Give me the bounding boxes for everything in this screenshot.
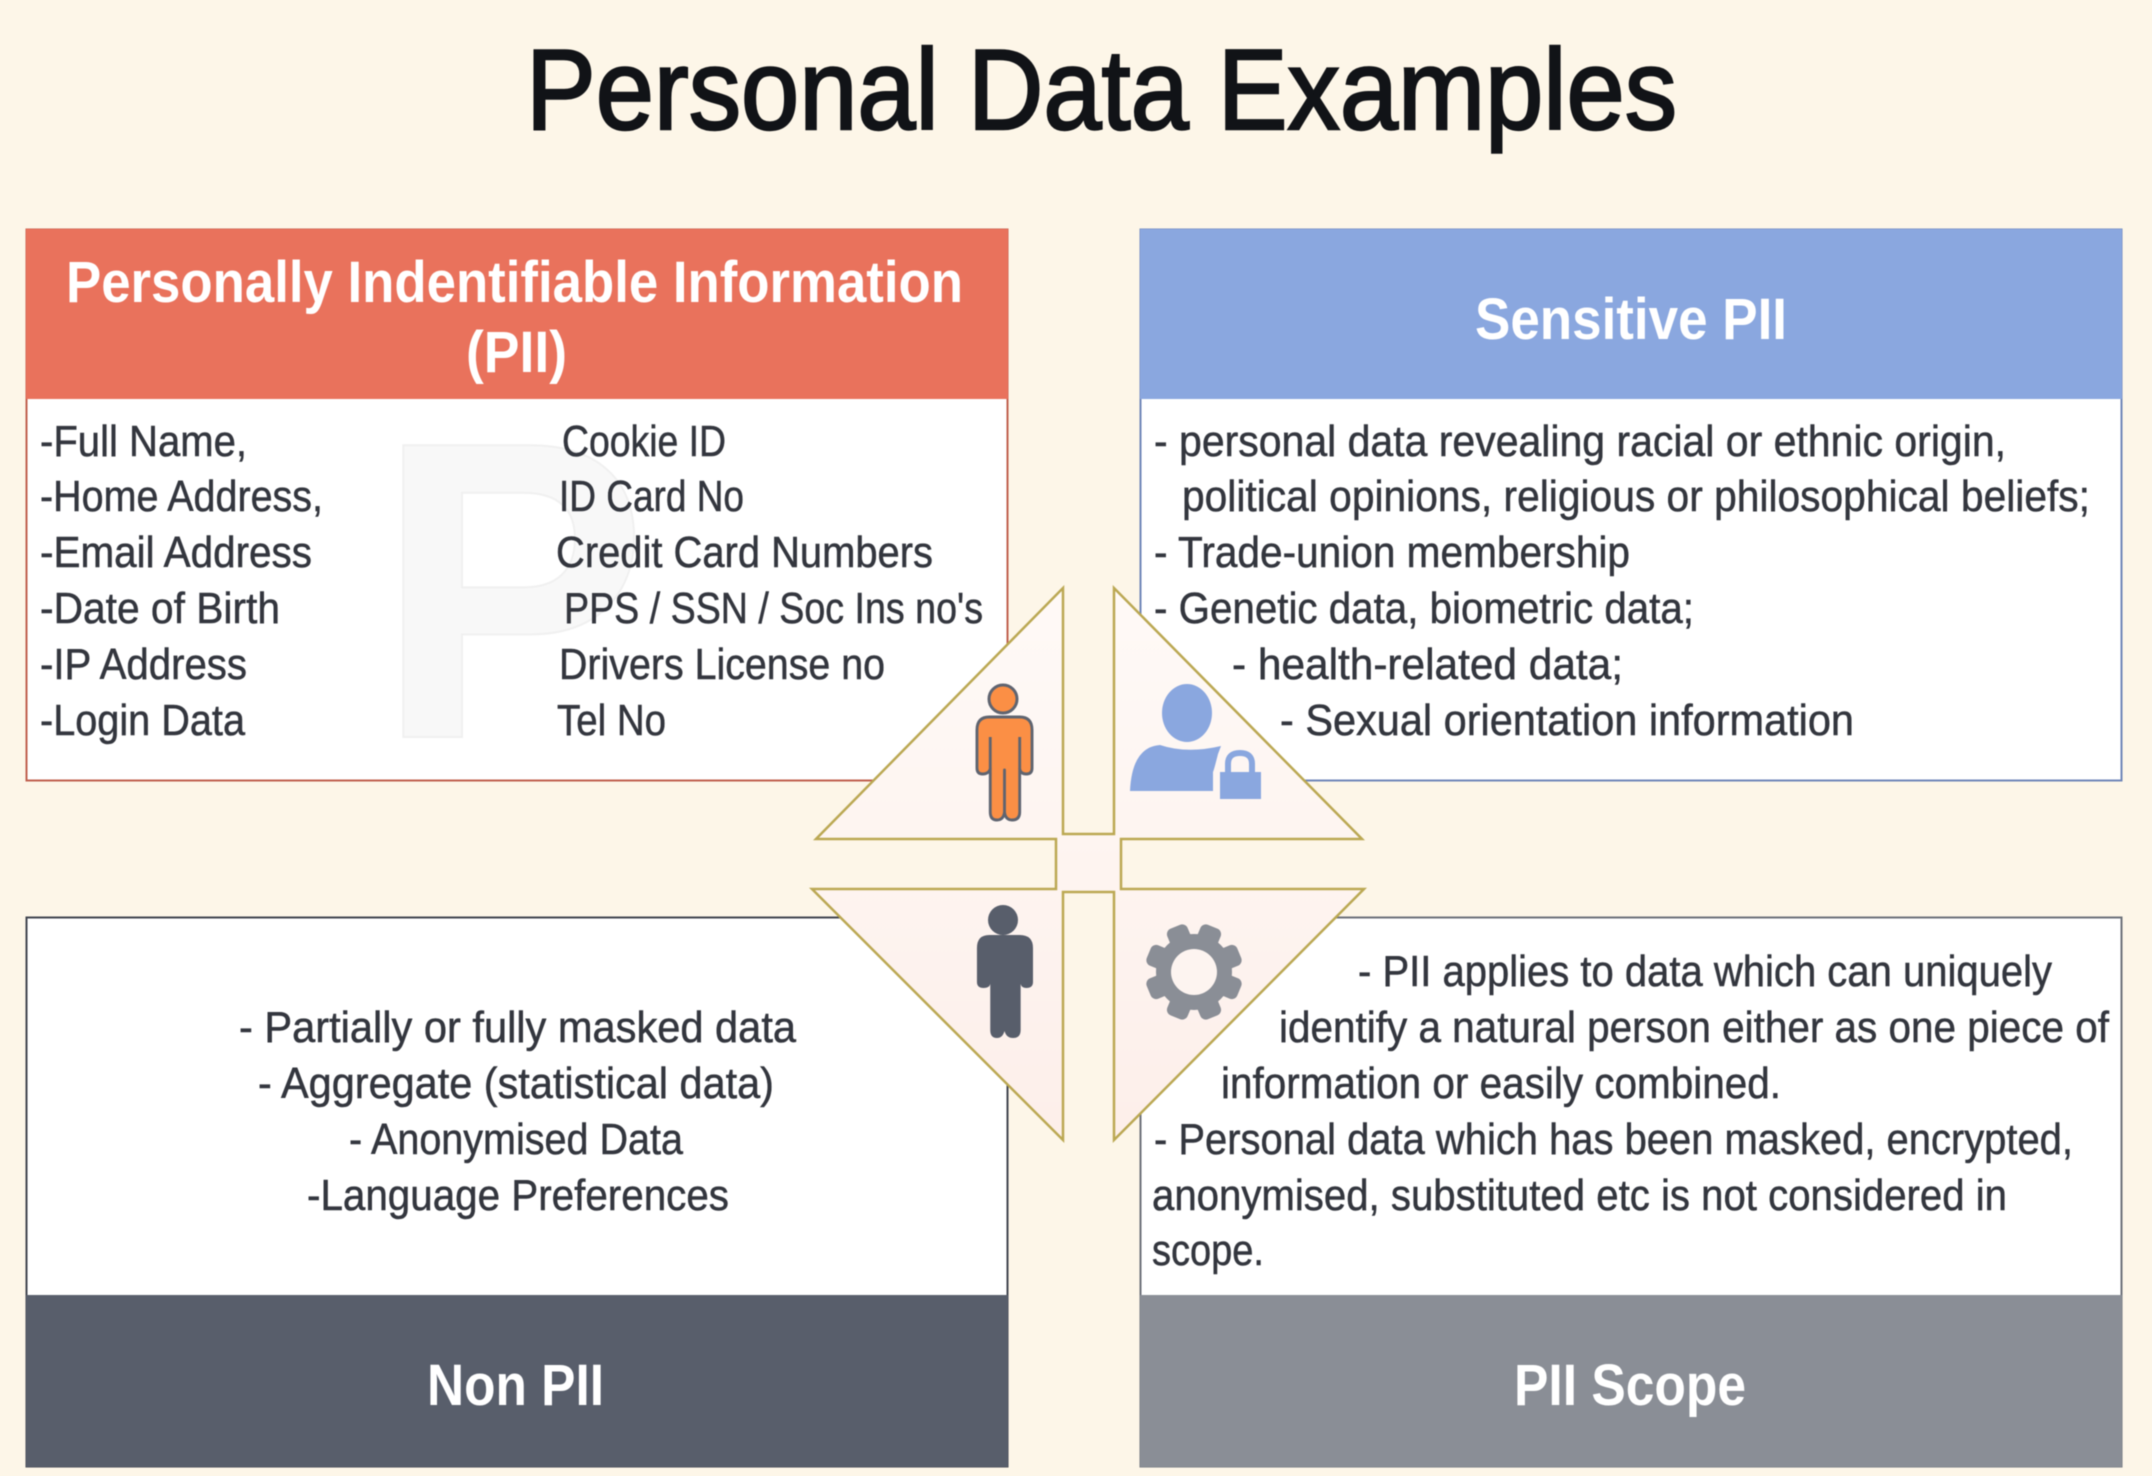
text block: sensitive data list: political opinions, religious or philosophical beliefs;	[1182, 472, 2090, 521]
text block: PII identifiers left column: -Date of Birth	[40, 584, 280, 633]
icon: blue person with padlock	[1130, 684, 1261, 799]
text block: non PII list: - Anonymised Data	[349, 1115, 683, 1164]
text block: PII identifiers left column: -Home Address,	[40, 472, 323, 521]
panel footer: PII scope: PII Scope	[1514, 1353, 1746, 1418]
text block: PII identifiers left column: -IP Address	[40, 640, 247, 689]
text block: PII identifiers right column	[556, 417, 983, 745]
panel header: sensitive PII	[1140, 229, 2122, 399]
text block: PII scope description: information or easily combined.	[1221, 1059, 1781, 1108]
text block: PII identifiers right column: ID Card No	[559, 472, 744, 521]
text block: PII scope description	[1152, 947, 2110, 1275]
panel: PII scope	[1140, 918, 2122, 1467]
text block: PII scope description: - Personal data which has been masked, encrypted,	[1154, 1115, 2073, 1164]
icon: gear	[1145, 923, 1243, 1021]
panel header: PII	[26, 229, 1008, 399]
panel: sensitive PII	[1140, 229, 2122, 780]
text block: PII identifiers left column: -Email Address	[40, 528, 312, 577]
central cross diagram	[812, 588, 1364, 1140]
text block: sensitive data list: - Sexual orientation information	[1280, 696, 1854, 745]
text block: PII identifiers right column: Drivers License no	[559, 640, 885, 689]
text block: PII scope description: - PII applies to data which can uniquely	[1358, 947, 2052, 996]
panel footer: non PII	[26, 1295, 1008, 1467]
icon: dark person	[977, 905, 1033, 1038]
panel footer: non PII: Non PII	[427, 1353, 604, 1418]
text block: sensitive data list: - health-related data;	[1232, 640, 1623, 689]
text block: sensitive data list: - Genetic data, biometric data;	[1154, 584, 1694, 633]
panel header: PII: Personally Indentifiable Information	[66, 250, 963, 315]
text block: PII scope description: anonymised, substituted etc is not considered in	[1152, 1171, 2007, 1220]
panel: personally identifiable information	[26, 229, 1008, 827]
text block: PII identifiers right column: Credit Card Numbers	[556, 528, 933, 577]
text block: PII identifiers left column	[40, 417, 323, 745]
text block: sensitive data list	[1154, 417, 2090, 745]
watermark letter: P	[376, 353, 648, 827]
text block: non PII list: - Aggregate (statistical data)	[258, 1059, 774, 1108]
text block: non PII list	[239, 1003, 796, 1220]
text block: PII identifiers left column: -Login Data	[40, 696, 245, 745]
panel header: PII: (PII)	[466, 320, 567, 385]
title: Personal Data Examples	[526, 27, 1677, 154]
text block: non PII list: -Language Preferences	[307, 1171, 729, 1220]
text block: PII identifiers right column: Cookie ID	[562, 417, 726, 466]
panel footer: PII scope	[1140, 1295, 2122, 1467]
panel: non PII	[26, 918, 1008, 1467]
text block: sensitive data list: - Trade-union membership	[1154, 528, 1630, 577]
text block: PII identifiers right column: Tel No	[557, 696, 666, 745]
panel header: sensitive PII: Sensitive PII	[1475, 287, 1787, 352]
text block: non PII list: - Partially or fully masked data	[239, 1003, 796, 1052]
text block: sensitive data list: - personal data revealing racial or ethnic origin,	[1154, 417, 2006, 466]
text block: PII scope description: scope.	[1152, 1226, 1264, 1275]
text block: PII identifiers right column: PPS / SSN / Soc Ins no's	[564, 584, 983, 633]
icon: orange person	[977, 685, 1032, 820]
text block: PII identifiers left column: -Full Name,	[40, 417, 247, 466]
